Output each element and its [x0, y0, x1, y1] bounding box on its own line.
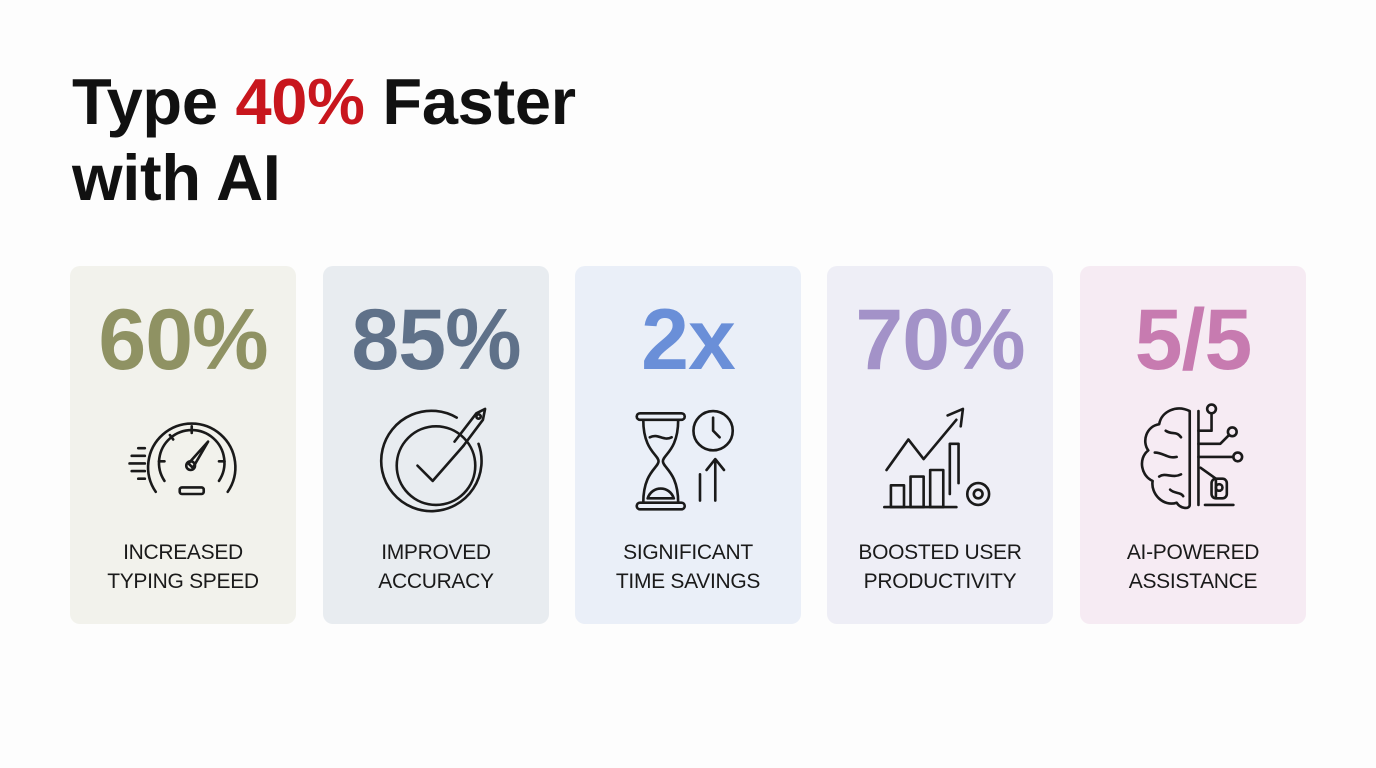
label: TYPING SPEED — [107, 570, 259, 593]
label: AI-POWERED — [1127, 541, 1259, 564]
label: SIGNIFICANT — [623, 541, 753, 564]
stat: 5/5: 5/5 — [1135, 292, 1251, 388]
label — [1127, 541, 1259, 593]
stat: 85%: 85% — [351, 292, 521, 388]
stat: 70%: 70% — [855, 292, 1025, 388]
stat: 60%: 60% — [98, 292, 268, 388]
panel: typing speed — [70, 266, 296, 624]
label — [616, 541, 760, 593]
panel: accuracy — [323, 266, 549, 624]
icon: check with pen — [380, 408, 486, 512]
title — [72, 65, 576, 214]
label: BOOSTED USER — [858, 541, 1022, 564]
panel: time savings — [575, 266, 801, 624]
icon: growth chart — [883, 408, 990, 508]
panel: AI assistance — [1080, 266, 1306, 624]
label — [858, 541, 1022, 593]
icon: hourglass clock — [635, 410, 734, 511]
label — [107, 541, 259, 593]
label: TIME SAVINGS — [616, 570, 760, 593]
label: IMPROVED — [381, 541, 491, 564]
label: PRODUCTIVITY — [864, 570, 1016, 593]
icon: speedometer — [128, 422, 237, 496]
title: with AI — [72, 141, 281, 214]
icon: brain circuit — [1140, 403, 1244, 510]
stat: 2x: 2x — [641, 292, 735, 388]
label — [378, 541, 494, 593]
label: ASSISTANCE — [1129, 570, 1257, 593]
label: INCREASED — [123, 541, 243, 564]
panel: productivity — [827, 266, 1053, 624]
label: ACCURACY — [378, 570, 494, 593]
title: Type 40% Faster — [72, 65, 576, 138]
